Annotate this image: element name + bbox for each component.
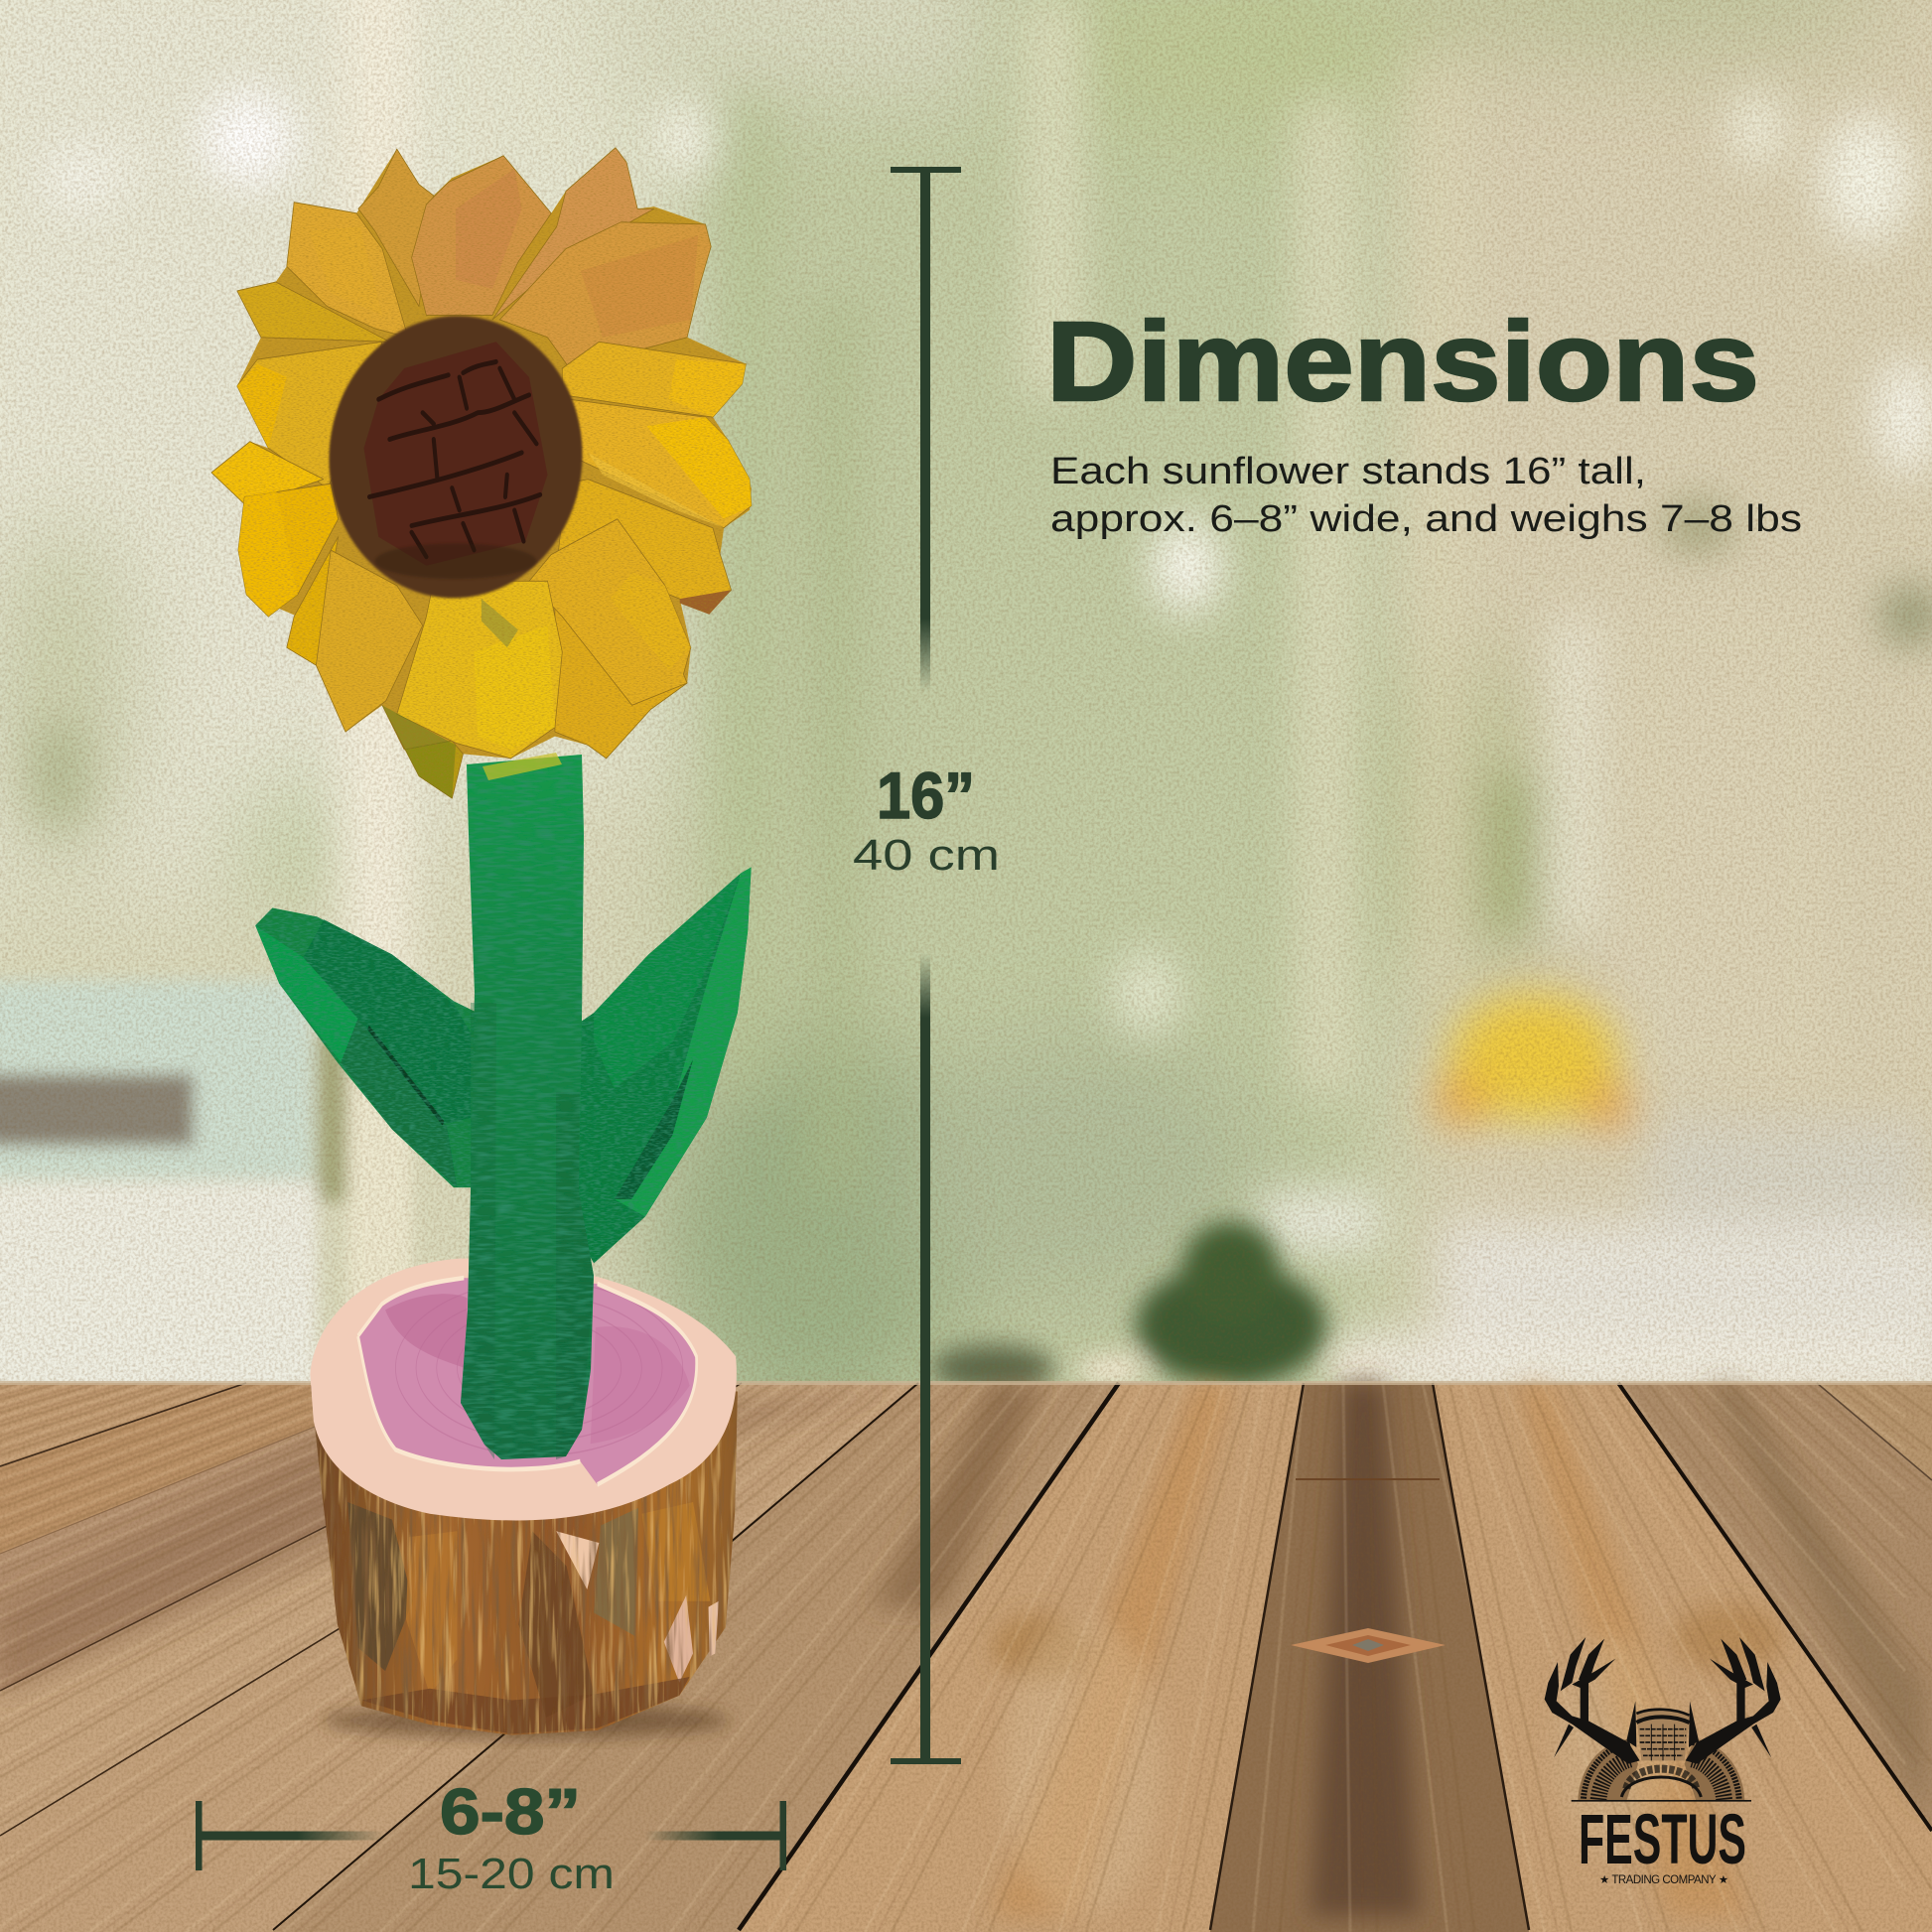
heading: Dimensions bbox=[1046, 299, 1759, 424]
Festus Trading Company logo bbox=[1545, 1637, 1781, 1886]
stem bbox=[461, 755, 594, 1459]
description text: approx. 6–8” wide, and weighs 7–8 lbs bbox=[1050, 498, 1802, 540]
seed grid grooves bbox=[369, 361, 540, 557]
left antler bbox=[1545, 1637, 1640, 1764]
log base bbox=[310, 1259, 738, 1735]
height dimension line bbox=[891, 167, 961, 1764]
left leaf bbox=[255, 908, 482, 1187]
sage shelf and white furniture, left bbox=[0, 981, 412, 1395]
plank seams bbox=[0, 1383, 1932, 1930]
carved sunflower sculpture bbox=[211, 148, 752, 1735]
right leaf bbox=[574, 867, 752, 1263]
stem collar bbox=[483, 753, 562, 780]
bark side of log bbox=[311, 1386, 738, 1735]
height label bbox=[853, 759, 1000, 880]
blurred white furniture, right bbox=[1261, 1122, 1932, 1400]
petal facets bbox=[237, 169, 752, 798]
logo tagline: ★ TRADING COMPANY ★ bbox=[1599, 1874, 1728, 1886]
wood pore noise bbox=[0, 1383, 1932, 1932]
width label bbox=[408, 1775, 615, 1898]
description text bbox=[1050, 451, 1802, 540]
wood grain lines bbox=[0, 1383, 1932, 1932]
width label: 6-8” bbox=[440, 1775, 581, 1848]
seed head bbox=[318, 301, 594, 614]
right antler bbox=[1686, 1637, 1781, 1764]
planks bbox=[0, 1383, 1932, 1932]
turkey fan bbox=[1572, 1709, 1751, 1802]
shadow under stump bbox=[323, 1703, 730, 1738]
blurred garden background bbox=[0, 0, 1932, 1489]
width dimension line bbox=[196, 1801, 786, 1870]
blurred yellow flowers bbox=[1434, 994, 1630, 1129]
logo wordmark: FESTUS bbox=[1579, 1801, 1746, 1879]
flower head bbox=[211, 148, 752, 798]
wood plank table top bbox=[0, 1381, 1932, 1932]
cut top of log bbox=[310, 1259, 737, 1520]
description text: Each sunflower stands 16” tall, bbox=[1050, 451, 1646, 492]
blurred dark bush bbox=[931, 1221, 1386, 1392]
width label: 15-20 cm bbox=[408, 1850, 615, 1898]
logo mark: antlers and turkey bbox=[1545, 1637, 1781, 1802]
petals bbox=[211, 148, 752, 798]
floor horizon highlight bbox=[0, 1381, 1932, 1385]
plank tone patches bbox=[0, 1383, 1926, 1916]
height label: 40 cm bbox=[853, 831, 1000, 880]
height label: 16” bbox=[877, 759, 975, 832]
knot: centre plank bbox=[1291, 1628, 1446, 1663]
